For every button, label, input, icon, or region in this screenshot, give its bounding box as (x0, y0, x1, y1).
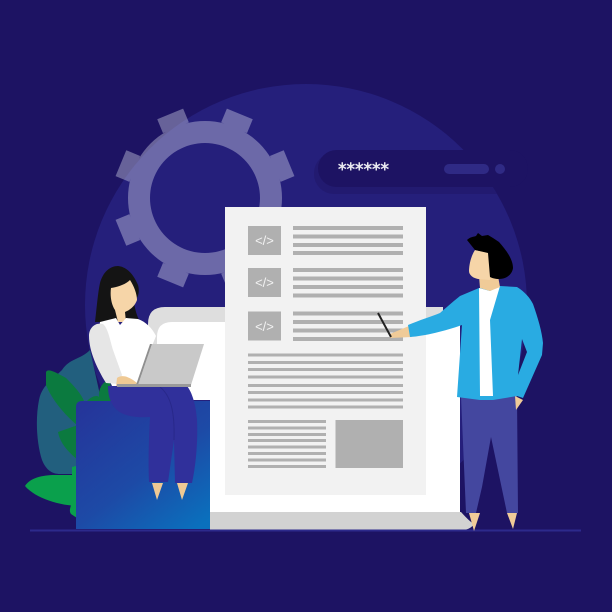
man right hand (515, 396, 523, 410)
man face (469, 250, 490, 280)
code row 1 (248, 226, 403, 255)
ground line (30, 530, 581, 532)
man trousers (461, 396, 518, 513)
document (225, 207, 426, 495)
monitor (148, 307, 474, 530)
woman legs (108, 386, 197, 483)
column lines (248, 420, 326, 468)
password dot (495, 164, 505, 174)
code row 1: </> (255, 233, 274, 248)
laptop (117, 344, 204, 387)
code row 2 (248, 268, 403, 298)
code row 2: </> (255, 275, 274, 290)
cube seat (76, 401, 210, 529)
icon: gear (116, 109, 294, 287)
plant (25, 350, 112, 520)
code row 3 (248, 312, 403, 341)
plant: bright leaf (25, 475, 80, 506)
woman feet (152, 483, 188, 500)
illustration scene (25, 84, 581, 532)
woman thigh crease (160, 387, 174, 440)
man hair (467, 233, 513, 279)
man forearm hand (390, 326, 412, 338)
password field (314, 150, 505, 194)
woman with laptop (89, 266, 204, 500)
plant: dark leaves (46, 370, 85, 425)
woman hair (95, 266, 140, 322)
woman neck and face (111, 280, 137, 322)
man shirt (479, 286, 500, 396)
man neck (479, 276, 500, 291)
document sheet (225, 207, 426, 495)
man jacket (408, 286, 543, 400)
paragraph lines (248, 354, 403, 408)
plant: teal bush (37, 350, 100, 474)
background circle (85, 84, 527, 526)
woman hand (116, 376, 137, 387)
password pill (444, 164, 489, 174)
man feet (469, 513, 517, 531)
woman shirt (96, 318, 156, 386)
man pen (378, 313, 391, 337)
image placeholder (336, 420, 403, 468)
password asterisks: ****** (338, 160, 389, 180)
code row 3: </> (255, 319, 274, 334)
man with pen (378, 233, 543, 531)
woman sleeve (89, 324, 122, 384)
